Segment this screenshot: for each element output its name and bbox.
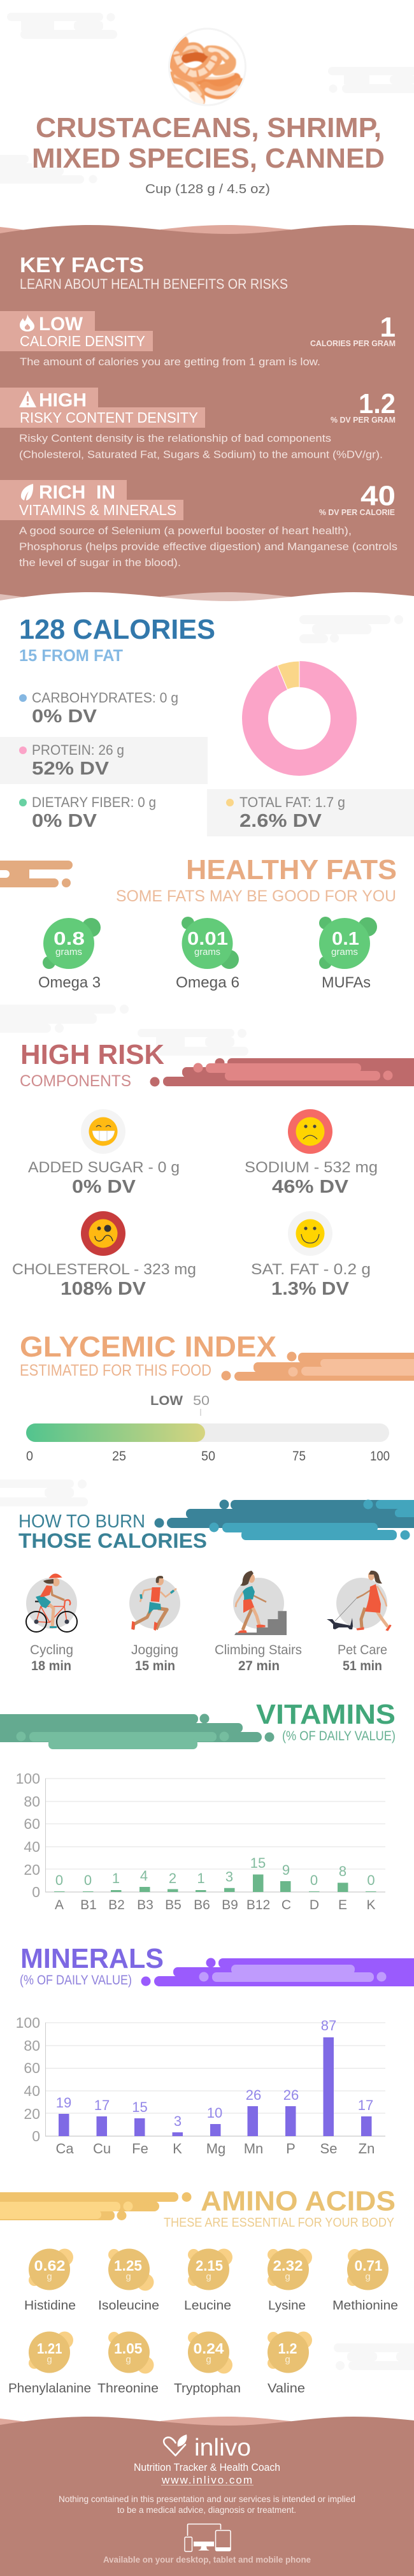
gauge readout: 50 — [193, 1394, 210, 1408]
amino badges row 2 — [8, 2332, 312, 2396]
header ribbon — [0, 861, 73, 887]
icon: devices — [185, 2524, 231, 2551]
bar chart: minerals: 0 — [32, 2128, 40, 2144]
bar chart: vitamins: 1 — [197, 1870, 205, 1886]
item: sodium: SODIUM - 532 mg — [245, 1159, 378, 1176]
amino badges row 2: Threonine — [97, 2382, 159, 2396]
header ribbon — [222, 1351, 414, 1381]
bar chart: vitamins: 3 — [225, 1869, 233, 1884]
heading: calories: 128 CALORIES — [19, 614, 215, 645]
item: added sugar: ADDED SUGAR - 0 g — [28, 1159, 180, 1176]
panel: high risk — [12, 1039, 414, 1299]
bar chart: vitamins: 60 — [24, 1816, 40, 1832]
panel: how to burn those calories — [18, 1499, 414, 1673]
heading: MINERALS — [20, 1943, 164, 1974]
header ribbon — [141, 1958, 414, 1986]
bar chart: vitamins — [16, 1770, 385, 1912]
disclaimer: to be a medical advice, diagnosis or treatment. — [117, 2505, 296, 2515]
bar chart: minerals: Fe — [132, 2141, 148, 2157]
activity labels: 27 min — [238, 1659, 280, 1673]
bar chart: vitamins: 0 — [55, 1872, 63, 1888]
bar chart: vitamins: 1 — [112, 1870, 120, 1886]
heading — [18, 1511, 207, 1552]
activity labels: 15 min — [135, 1659, 175, 1673]
activity labels: Jogging — [131, 1643, 178, 1657]
bar chart: vitamins: B6 — [194, 1898, 210, 1912]
bar chart: vitamins: 20 — [24, 1861, 40, 1878]
disclaimer: Nothing contained in this presentation and our services is intended or implied — [59, 2494, 355, 2504]
heading: VITAMINS — [256, 1699, 396, 1730]
amino badges row 2: g — [206, 2354, 211, 2365]
panel: minerals — [16, 1943, 414, 2157]
bar chart: minerals: 80 — [24, 2037, 40, 2054]
header ribbon — [0, 2192, 191, 2220]
gauge axis: 0 — [26, 1449, 33, 1464]
bar chart: minerals: Mg — [206, 2141, 225, 2157]
fact: low calorie density: CALORIE DENSITY — [20, 333, 145, 349]
bar chart: vitamins: B12 — [246, 1898, 270, 1912]
bar chart: minerals: 26 — [283, 2087, 299, 2103]
bar chart: minerals: 100 — [16, 2014, 40, 2031]
amino badges row 2: g — [125, 2354, 131, 2365]
bar chart: vitamins: B1 — [80, 1898, 97, 1912]
heading: HIGH RISK — [20, 1039, 164, 1070]
legend: protein — [0, 737, 208, 784]
item: cholesterol — [12, 1211, 196, 1299]
amino badges row 1: 2.15 — [196, 2257, 223, 2274]
activity labels: Cycling — [30, 1643, 73, 1657]
bar chart: minerals: K — [173, 2141, 182, 2157]
fact: high risky content density: % DV PER GRAM — [331, 415, 396, 425]
badge: omega 6: 0.01 — [187, 929, 228, 949]
subheading: COMPONENTS — [20, 1072, 131, 1090]
item: saturated fat: SAT. FAT - 0.2 g — [251, 1261, 371, 1278]
panel: vitamins — [0, 1699, 396, 1912]
tagline: Nutrition Tracker & Health Coach — [134, 2461, 280, 2473]
bar chart: vitamins: 40 — [24, 1838, 40, 1855]
amino badges row 2: Valine — [268, 2382, 305, 2396]
bar chart: vitamins: B5 — [165, 1898, 182, 1912]
amino badges row 2: 1.2 — [278, 2340, 297, 2357]
fact: low calorie density — [0, 311, 396, 368]
bar chart: minerals: 26 — [246, 2087, 261, 2103]
fact: rich in vitamins and minerals: the level of sugar in the blood). — [19, 557, 181, 569]
fact: low calorie density: The amount of calories you are getting from 1 gram is low. — [20, 356, 320, 368]
bar chart: vitamins: 100 — [16, 1770, 40, 1787]
heading: HOW TO BURN — [18, 1511, 145, 1532]
subheading: SOME FATS MAY BE GOOD FOR YOU — [116, 887, 396, 905]
fact: rich in vitamins and minerals — [0, 480, 397, 569]
gauge axis: 75 — [292, 1449, 306, 1464]
bar chart: minerals — [16, 2014, 385, 2157]
badge: mufas: MUFAs — [322, 974, 371, 991]
amino badges row 1: 0.71 — [354, 2257, 383, 2274]
bar chart: minerals: 40 — [24, 2083, 40, 2099]
gauge bar — [26, 1423, 389, 1442]
gauge axis: 100 — [370, 1449, 390, 1464]
logo: inlivo — [194, 2434, 251, 2461]
fact: rich in vitamins and minerals: % DV PER CALORIE — [319, 507, 395, 517]
bar chart: minerals: 19 — [56, 2095, 71, 2111]
badge: omega 6: Omega 6 — [176, 974, 239, 991]
amino badges row 2: g — [285, 2354, 290, 2365]
badge: omega 6: grams — [194, 947, 220, 957]
bar chart: vitamins: 80 — [24, 1793, 40, 1810]
subheading: (% OF DAILY VALUE) — [282, 1729, 396, 1743]
legend: dietary fiber — [19, 794, 156, 831]
bar chart: minerals: 3 — [174, 2113, 182, 2129]
fact: low calorie density: 1 — [380, 312, 396, 343]
amino badges row 1: g — [46, 2271, 52, 2282]
fact: high risky content density: RISKY CONTENT DENSITY — [20, 409, 198, 426]
activity labels — [30, 1643, 387, 1673]
amino badges row 1: Isoleucine — [98, 2299, 159, 2313]
amino badges row 1: 0.62 — [34, 2257, 65, 2274]
panel: amino acids — [0, 2185, 398, 2396]
header ribbon — [154, 1499, 414, 1540]
badge: mufas — [319, 917, 377, 991]
amino badges row 1: 2.32 — [273, 2257, 303, 2274]
item: added sugar: 0% DV — [72, 1177, 136, 1197]
fact: rich in vitamins and minerals: RICH IN — [39, 482, 115, 503]
fact: rich in vitamins and minerals: VITAMINS & MINERALS — [19, 502, 176, 518]
amino badges row 1: Lysine — [268, 2299, 306, 2313]
gauge axis — [26, 1449, 390, 1464]
bar chart: vitamins: E — [338, 1898, 347, 1912]
badge: mufas: 0.1 — [332, 929, 359, 949]
bar chart: vitamins: 0 — [367, 1872, 375, 1888]
bar chart: vitamins: B3 — [137, 1898, 153, 1912]
bar chart: minerals: 60 — [24, 2060, 40, 2076]
bar chart: minerals: Zn — [359, 2141, 375, 2157]
item: saturated fat: 1.3% DV — [271, 1279, 350, 1299]
item: added sugar — [28, 1109, 180, 1197]
amino badges row 2: g — [46, 2354, 52, 2365]
donut chart — [255, 661, 344, 762]
legend: total fat: TOTAL FAT: 1.7 g — [239, 794, 345, 810]
bar chart: minerals: P — [286, 2141, 296, 2157]
badge: mufas: grams — [331, 947, 358, 957]
bar chart: minerals: 20 — [24, 2106, 40, 2122]
bar chart: vitamins: 0 — [32, 1884, 40, 1900]
legend: carbohydrates: 0% DV — [32, 706, 97, 727]
bar chart: vitamins: 8 — [339, 1863, 346, 1879]
amino badges row 1: g — [285, 2271, 290, 2282]
subheading: ESTIMATED FOR THIS FOOD — [20, 1362, 211, 1379]
panel: calories — [0, 614, 414, 836]
bar chart: minerals: 17 — [358, 2097, 373, 2113]
badge: omega 3: 0.8 — [54, 929, 85, 949]
panel: healthy fats — [0, 854, 397, 991]
amino badges row 2: Tryptophan — [174, 2382, 241, 2396]
item: cholesterol: CHOLESTEROL - 323 mg — [12, 1261, 196, 1278]
subheading: (% OF DAILY VALUE) — [20, 1973, 132, 1988]
activity labels: Pet Care — [338, 1643, 387, 1657]
legend: dietary fiber: DIETARY FIBER: 0 g — [32, 794, 156, 810]
amino badges row 2: 1.21 — [37, 2340, 62, 2357]
fact: rich in vitamins and minerals: A good source of Selenium (a powerful booster of heart health), — [19, 525, 352, 537]
amino badges row 1: g — [125, 2271, 131, 2282]
icon: flame — [20, 314, 34, 331]
amino badges row 1 — [24, 2249, 398, 2313]
legend: protein: PROTEIN: 26 g — [32, 742, 124, 758]
legend: carbohydrates: CARBOHYDRATES: 0 g — [32, 690, 178, 706]
fact: low calorie density: LOW — [39, 314, 83, 335]
activity labels: Climbing Stairs — [215, 1643, 302, 1657]
bar chart: minerals: Ca — [55, 2141, 74, 2157]
amino badges row 1: Histidine — [24, 2299, 76, 2313]
fact: high risky content density: Risky Content density is the relationship of bad components — [19, 432, 331, 444]
heading: AMINO ACIDS — [201, 2185, 396, 2217]
activity: pet care — [327, 1571, 391, 1631]
bar chart: minerals: Cu — [93, 2141, 111, 2157]
badge: omega 6 — [176, 917, 239, 991]
bar chart: vitamins: C — [282, 1898, 291, 1912]
legend: dietary fiber: 0% DV — [32, 811, 97, 831]
fact: rich in vitamins and minerals: 40 — [360, 481, 396, 511]
bar chart: minerals: Se — [320, 2141, 337, 2157]
activity labels: 18 min — [31, 1659, 71, 1673]
title: CRUSTACEANS, SHRIMP, — [36, 112, 382, 143]
bar chart: minerals: 10 — [207, 2105, 222, 2121]
bar chart: vitamins: K — [366, 1898, 376, 1912]
panel: key facts — [0, 225, 414, 606]
fact: high risky content density: HIGH — [39, 390, 87, 411]
title — [32, 112, 385, 174]
bar chart: vitamins: D — [310, 1898, 319, 1912]
amino badges row 2: 0.24 — [194, 2340, 224, 2357]
logo — [164, 2434, 251, 2461]
badge: omega 3: grams — [55, 947, 82, 957]
bar chart: vitamins: 0 — [310, 1872, 318, 1888]
legend: total fat: 2.6% DV — [239, 811, 322, 831]
legend: carbohydrates — [19, 690, 178, 727]
icon: warning triangle — [19, 391, 36, 407]
gauge axis: 50 — [201, 1449, 215, 1464]
amino badges row 2: 1.05 — [114, 2340, 143, 2357]
website: www.inlivo.com — [161, 2474, 252, 2486]
bar chart: vitamins: A — [55, 1898, 64, 1912]
amino badges row 1: Leucine — [184, 2299, 231, 2313]
fact: high risky content density: 1.2 — [359, 388, 396, 419]
activity: cycling — [26, 1574, 77, 1632]
availability note: Available on your desktop, tablet and mobile phone — [103, 2554, 311, 2565]
heading: HEALTHY FATS — [186, 854, 397, 885]
bar chart: minerals: Mn — [244, 2141, 263, 2157]
disclaimer — [59, 2494, 355, 2515]
fact: high risky content density: (Cholesterol, Saturated Fat, Sugars & Sodium) to the amount (%DV/gr). — [19, 449, 383, 460]
header: food photo — [168, 28, 246, 106]
bar chart: minerals: 17 — [94, 2097, 110, 2113]
panel: glycemic index — [20, 1330, 414, 1464]
amino badges row 1: g — [206, 2271, 211, 2282]
activity labels: 51 min — [343, 1659, 382, 1673]
bar chart: vitamins: 9 — [282, 1862, 290, 1878]
bar chart: vitamins: B9 — [222, 1898, 238, 1912]
heading: THOSE CALORIES — [18, 1529, 207, 1552]
subheading: LEARN ABOUT HEALTH BENEFITS OR RISKS — [20, 276, 288, 292]
bar chart: minerals: 15 — [132, 2099, 148, 2115]
gauge readout: LOW — [150, 1394, 183, 1408]
heading: key facts: KEY FACTS — [20, 253, 144, 277]
serving size: Cup (128 g / 4.5 oz) — [145, 182, 270, 196]
amino badges row 1: Methionine — [332, 2299, 398, 2313]
item: sodium: 46% DV — [272, 1177, 349, 1197]
badge: omega 3: Omega 3 — [38, 974, 101, 991]
amino badges row 2: Phenylalanine — [8, 2382, 91, 2396]
bar chart: vitamins: 4 — [140, 1868, 148, 1884]
gauge axis: 25 — [112, 1449, 126, 1464]
bar chart: vitamins: 2 — [169, 1870, 176, 1886]
bar chart: minerals: 87 — [321, 2018, 336, 2034]
item: cholesterol: 108% DV — [61, 1279, 146, 1299]
item: sodium — [245, 1109, 378, 1197]
amino badges row 1: g — [365, 2271, 371, 2282]
fact: rich in vitamins and minerals: Phosphorus (helps provide effective digestion) and Manganese (controls — [19, 541, 397, 553]
panel: footer — [0, 2417, 414, 2576]
subheading: THESE ARE ESSENTIAL FOR YOUR BODY — [164, 2216, 394, 2230]
subheading: from fat: 15 FROM FAT — [19, 646, 123, 665]
fact: high risky content density — [0, 388, 396, 460]
icon: leaf — [21, 484, 33, 500]
fact: low calorie density: CALORIES PER GRAM — [310, 338, 396, 348]
title: MIXED SPECIES, CANNED — [32, 143, 385, 174]
header ribbon — [0, 1714, 274, 1749]
header ribbon — [150, 1058, 414, 1086]
bar chart: vitamins: 0 — [84, 1872, 92, 1888]
heading: GLYCEMIC INDEX — [20, 1330, 276, 1363]
legend: total fat — [207, 789, 414, 836]
amino badges row 1: 1.25 — [114, 2257, 142, 2274]
bar chart: vitamins: B2 — [108, 1898, 125, 1912]
legend: protein: 52% DV — [32, 759, 110, 779]
badge: omega 3 — [38, 918, 101, 991]
activity: climbing stairs — [233, 1571, 287, 1635]
item: saturated fat — [251, 1211, 371, 1299]
activity: jogging — [129, 1576, 180, 1630]
gauge readout — [150, 1394, 210, 1416]
bar chart: vitamins: 15 — [250, 1855, 266, 1871]
